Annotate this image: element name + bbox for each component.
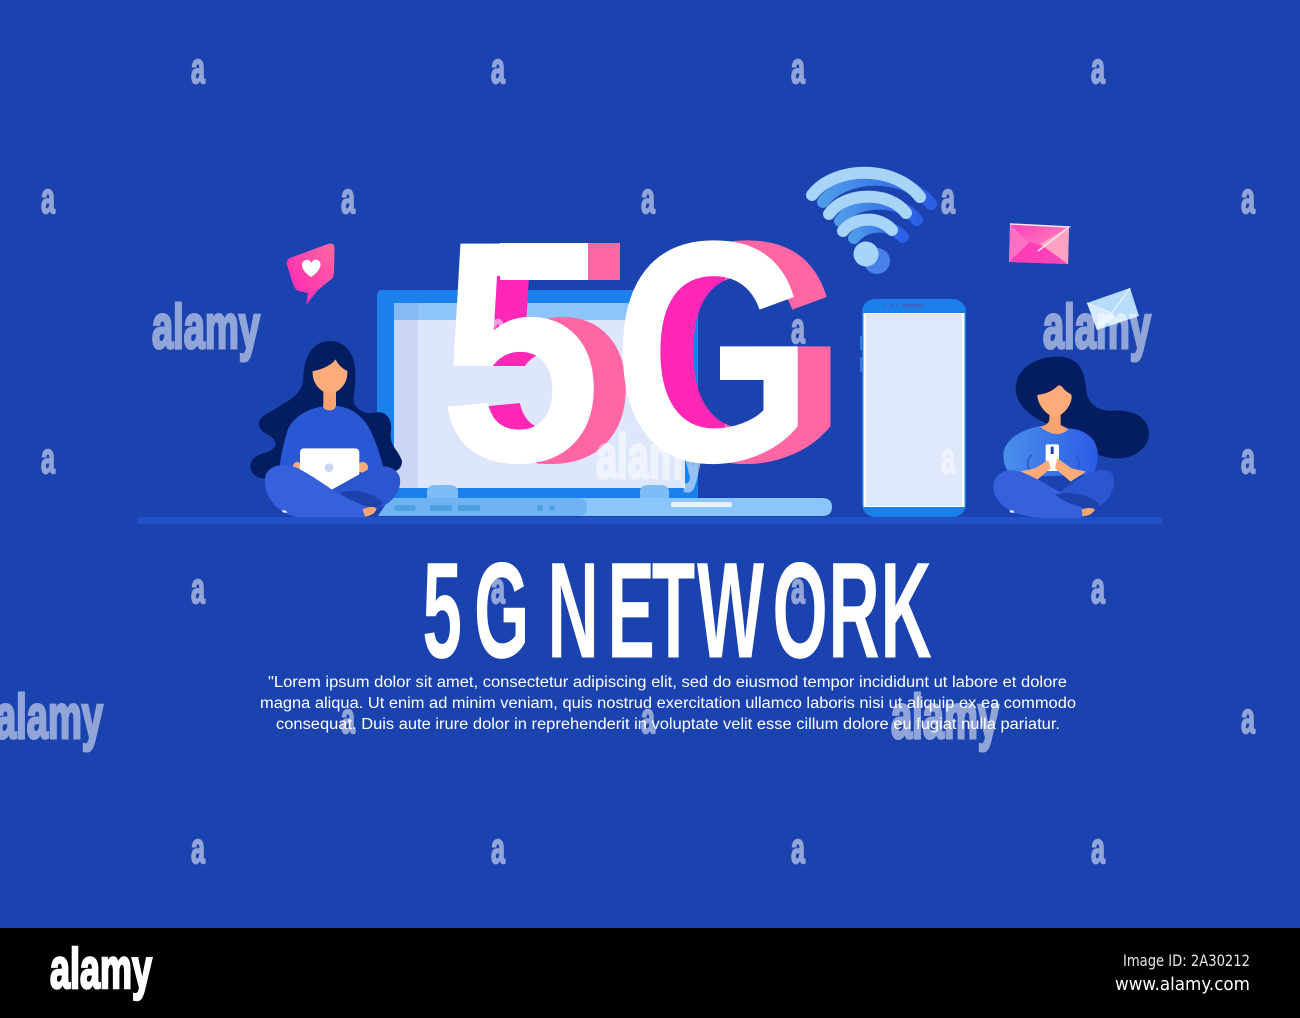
watermarks: a <box>941 434 955 483</box>
watermarks: a <box>1091 44 1105 93</box>
right leg <box>328 466 400 508</box>
watermarks: a <box>791 564 805 613</box>
5G shadow pink <box>540 240 830 464</box>
watermarks: a <box>1241 694 1255 743</box>
watermarks: a <box>941 174 955 223</box>
watermarks: a <box>341 694 355 743</box>
watermarks: a <box>641 174 655 223</box>
watermarks: a <box>491 304 505 353</box>
watermarks: a <box>1091 824 1105 873</box>
5G shadow pink: 5 <box>470 175 634 528</box>
5 top bar shadow extension <box>584 243 620 280</box>
woman with laptop <box>250 341 402 517</box>
watermarks: a <box>341 174 355 223</box>
foot <box>1082 508 1095 516</box>
body text <box>260 674 1076 733</box>
fringe <box>1033 378 1073 395</box>
watermarks: alamy <box>0 683 103 752</box>
watermarks: a <box>791 824 805 873</box>
body text: magna aliqua. Ut enim ad minim veniam, quis nostrud exercitation ullamco laboris nisi ut aliquip ex ea commodo <box>260 695 1076 712</box>
watermarks: a <box>641 694 655 743</box>
watermarks: alamy <box>152 293 260 362</box>
icon: pink envelope <box>1009 224 1069 264</box>
watermarks: a <box>791 304 805 353</box>
watermarks: a <box>791 44 805 93</box>
watermarks: alamy <box>1043 293 1151 362</box>
smartphone <box>860 299 966 517</box>
footer logo: alamy <box>50 937 152 1001</box>
left leg <box>265 465 368 517</box>
icon: blue envelope <box>1087 288 1139 330</box>
arms <box>1020 460 1051 482</box>
tablet <box>300 448 359 491</box>
5G big lettering <box>448 240 830 464</box>
watermarks: a <box>491 824 505 873</box>
5G shadow magenta: G <box>645 176 847 529</box>
watermarks: alamy <box>596 423 704 492</box>
watermarks: a <box>191 44 205 93</box>
image id: Image ID: 2A30212 <box>1123 951 1250 970</box>
G glyph white: G <box>612 176 814 529</box>
legs <box>1058 470 1114 507</box>
watermarks: a <box>491 564 505 613</box>
sweater shading <box>1028 455 1079 475</box>
body text: "Lorem ipsum dolor sit amet, consectetur adipiscing elit, sed do eiusmod tempor incididunt ut labore et dolore <box>268 674 1067 691</box>
face <box>313 358 347 393</box>
watermarks: a <box>1241 174 1255 223</box>
laptop <box>377 290 832 516</box>
footer bar <box>0 928 1300 1018</box>
watermarks <box>0 44 1255 873</box>
face <box>1037 385 1072 417</box>
phone in hands <box>1046 444 1059 471</box>
hair <box>1016 357 1149 458</box>
watermarks: a <box>1241 434 1255 483</box>
watermarks: a <box>191 824 205 873</box>
title: 5G NETWORK <box>422 535 932 688</box>
5G shadow magenta <box>488 244 725 464</box>
fringe <box>310 347 350 372</box>
5G shadow pink: G <box>645 176 847 529</box>
watermarks: a <box>41 174 55 223</box>
body text: consequat. Duis aute irure dolor in reprehenderit in voluptate velit esse cillum dolore eu fugiat nulla pariatur. <box>276 716 1060 733</box>
sweater <box>1003 426 1098 477</box>
watermarks: a <box>491 44 505 93</box>
watermarks: a <box>1091 564 1105 613</box>
hands <box>293 462 302 473</box>
watermarks: a <box>41 434 55 483</box>
woman with phone <box>993 357 1149 519</box>
ground line <box>137 517 1163 524</box>
watermarks: alamy <box>891 683 999 752</box>
5 glyph white: 5 <box>438 175 602 528</box>
5 top bar white extension <box>500 243 588 280</box>
neck <box>1040 410 1068 434</box>
hair <box>250 341 402 479</box>
sweater <box>279 406 384 470</box>
icon: wifi <box>812 173 931 274</box>
watermarks: a <box>191 564 205 613</box>
foot <box>363 507 377 517</box>
5G shadow magenta: 5 <box>470 175 634 528</box>
neck <box>323 390 336 410</box>
website: www.alamy.com <box>1115 974 1250 995</box>
watermarks: a <box>341 434 355 483</box>
icon: heart speech bubble <box>287 244 334 305</box>
